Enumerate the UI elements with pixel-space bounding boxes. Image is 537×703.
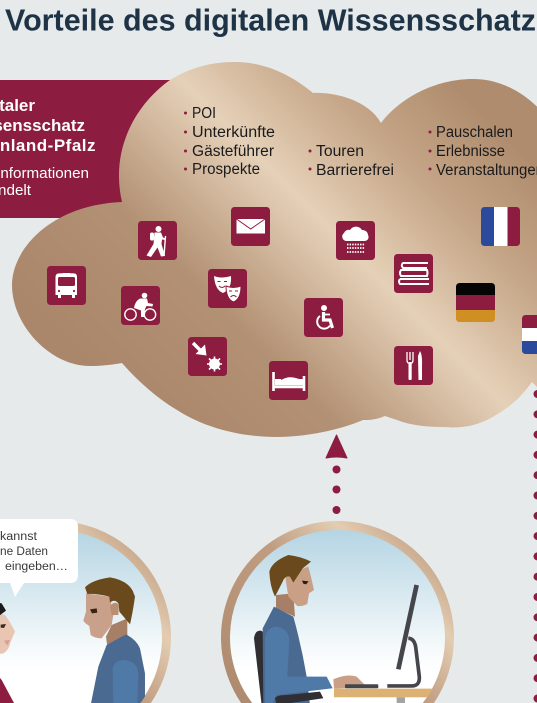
icon: envelope xyxy=(231,207,270,246)
icon: flag of the Netherlands xyxy=(522,315,537,354)
text block: list column 1 xyxy=(184,105,275,178)
chair arm xyxy=(275,692,323,703)
icon: flag of France xyxy=(481,207,520,246)
callout: speech bubble: eingeben… xyxy=(5,561,68,573)
panel: person at computer circle xyxy=(226,526,450,703)
text block: list column 1: POI xyxy=(192,105,216,122)
arrow: upward dotted arrow to cloud xyxy=(326,435,347,514)
callout: speech bubble: ne Daten xyxy=(0,546,48,558)
panel: conversation circle xyxy=(0,526,166,703)
icon: bed xyxy=(269,361,308,400)
text block: list column 1: Prospekte xyxy=(192,161,260,178)
text block: list column 2 xyxy=(308,143,394,179)
icon: arrow to burst xyxy=(188,337,227,376)
icon: cyclist xyxy=(121,286,160,325)
desk xyxy=(334,689,437,703)
icon: cutlery xyxy=(394,346,433,385)
panel: digital knowledge label xyxy=(0,80,175,218)
text block: list column 2: Touren xyxy=(316,143,364,160)
arrow: dotted line on right edge xyxy=(534,390,537,702)
callout: speech bubble: kannst xyxy=(0,531,38,543)
callout: speech bubble xyxy=(0,519,78,597)
title: Vorteile des digitalen Wissensschatz xyxy=(5,2,536,38)
cloud xyxy=(12,62,537,437)
icon: wheelchair xyxy=(304,298,343,337)
text block: list column 3: Pauschalen xyxy=(436,124,513,141)
icon: books xyxy=(394,254,433,293)
man in profile xyxy=(83,577,145,703)
text block: list column 3: Erlebnisse xyxy=(436,143,505,160)
computer xyxy=(345,585,419,688)
icon: theatre masks xyxy=(208,269,247,308)
icon: hiker xyxy=(138,221,177,260)
woman xyxy=(0,602,15,703)
icon: bus xyxy=(47,266,86,305)
man seated xyxy=(263,555,365,703)
icon: flag of Germany xyxy=(456,283,495,322)
chair back xyxy=(254,630,264,703)
text block: list column 2: Barrierefrei xyxy=(316,162,394,179)
text block: list column 3 xyxy=(428,124,537,179)
text block: list column 1: Unterkünfte xyxy=(192,124,275,141)
text block: list column 1: Gästeführer xyxy=(192,143,274,160)
icon: rain cloud xyxy=(336,221,375,260)
